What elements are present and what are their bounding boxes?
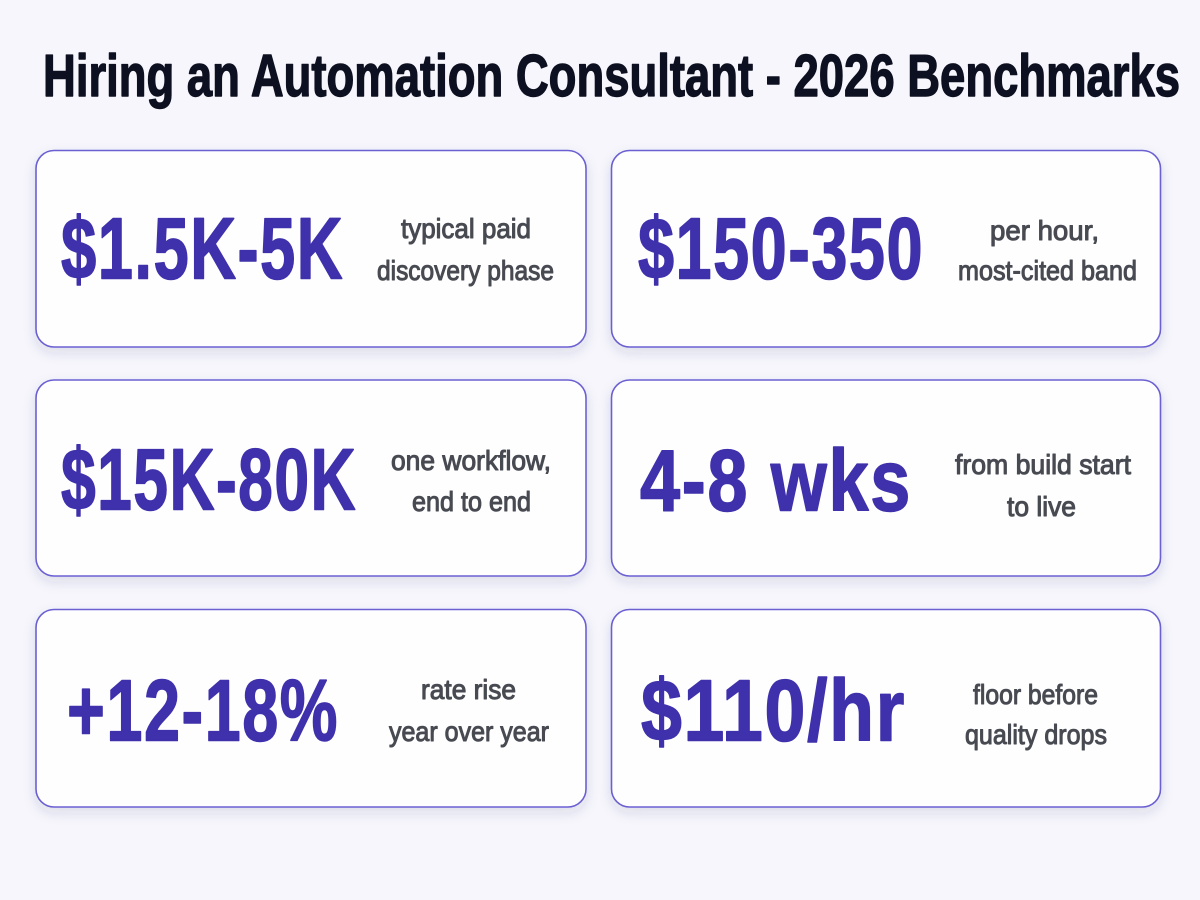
stat value: $1.5K-5K: $1.5K-5K (61, 200, 344, 298)
panel: hourly rate benchmark (612, 150, 1160, 347)
label: from build start to live: to live (1007, 491, 1076, 522)
panel: timeline benchmark (612, 380, 1160, 576)
label: floor before quality drops: quality drops (965, 719, 1107, 750)
stat value: $15K-80K: $15K-80K (61, 432, 357, 528)
panel: discovery phase benchmark (36, 150, 586, 347)
label: one workflow, end to end: one workflow, (391, 445, 551, 476)
label: per hour, most-cited band: per hour, (990, 215, 1099, 246)
label: typical paid discovery phase: typical paid (401, 213, 531, 244)
stat value: +12-18%: +12-18% (67, 662, 339, 760)
label: rate rise year over year: rate rise (421, 674, 516, 705)
panel: rate rise benchmark (36, 610, 586, 807)
label: typical paid discovery phase (377, 213, 554, 286)
label: floor before quality drops (965, 679, 1107, 750)
label: from build start to live (955, 449, 1131, 522)
stat value: $110/hr: $110/hr (641, 662, 906, 760)
stat value: $150-350: $150-350 (638, 200, 924, 298)
stat value: 4-8 wks: 4-8 wks (640, 432, 912, 530)
label: rate rise year over year (389, 674, 549, 747)
label: per hour, most-cited band (958, 215, 1137, 286)
panel: workflow cost benchmark (36, 380, 586, 576)
label: from build start to live: from build start (955, 449, 1131, 480)
label: floor before quality drops: floor before (973, 679, 1098, 710)
label: typical paid discovery phase: discovery phase (377, 255, 554, 286)
label: one workflow, end to end (391, 445, 551, 517)
label: one workflow, end to end: end to end (412, 486, 531, 517)
label: per hour, most-cited band: most-cited band (958, 255, 1137, 286)
panel: rate floor benchmark (612, 610, 1160, 807)
label: rate rise year over year: year over year (389, 716, 549, 747)
